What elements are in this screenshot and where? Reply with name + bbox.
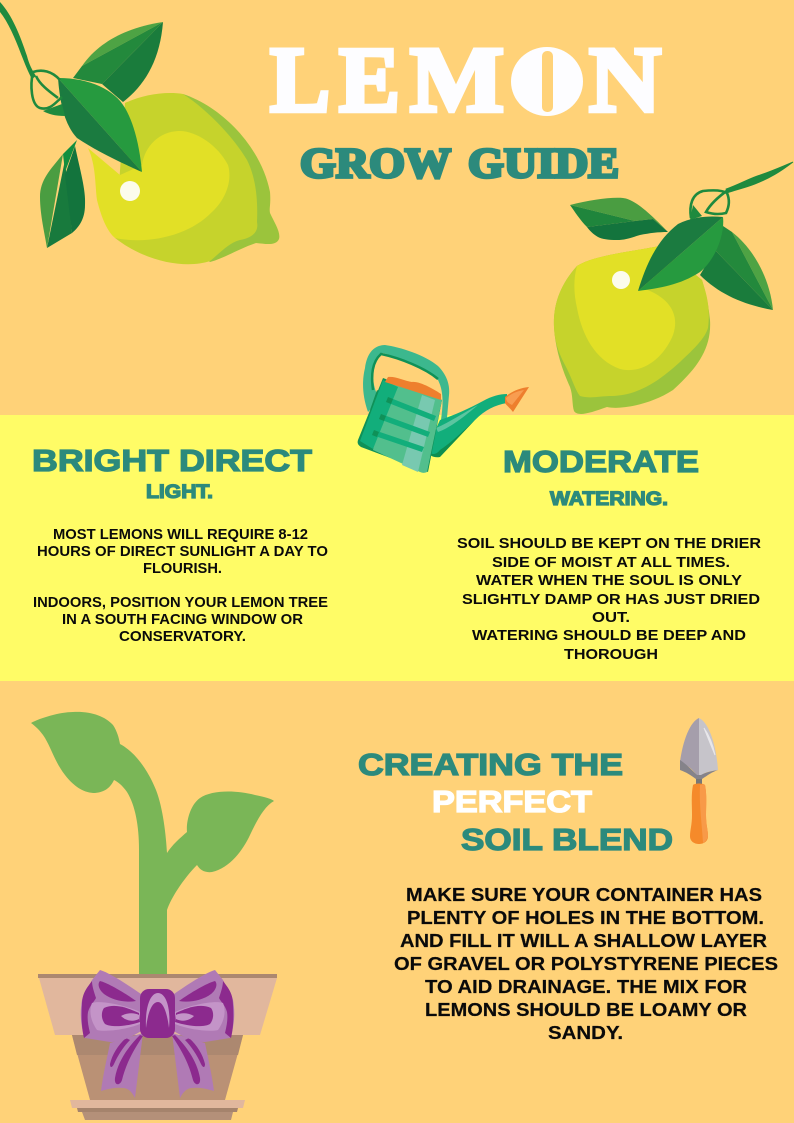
text block: soil advice: LEMONS SHOULD BE LOAMY OR (425, 1000, 747, 1020)
panel: yellow light and watering band (0, 415, 794, 681)
text block: light advice: FLOURISH. (143, 561, 222, 577)
text block: watering advice: THOROUGH (564, 647, 658, 663)
subtitle: GROW GUIDE (300, 142, 619, 188)
icon: garden trowel (680, 718, 718, 844)
heading: creating the: CREATING THE (358, 747, 623, 782)
title: LEMON: L (270, 29, 330, 132)
text block: watering advice (457, 536, 761, 663)
title: LEMON: M (410, 29, 504, 132)
heading: soil blend: SOIL BLEND (461, 822, 673, 857)
heading: bright direct: BRIGHT DIRECT (32, 443, 312, 478)
subheading: watering: WATERING. (550, 489, 668, 510)
text block: watering advice: SLIGHTLY DAMP OR HAS JUST DRIED (462, 592, 760, 608)
text block: watering advice: SIDE OF MOIST AT ALL TIMES. (492, 555, 730, 571)
text block: watering advice: WATER WHEN THE SOUL IS ONLY (476, 573, 742, 589)
bow (81, 970, 234, 1098)
text block: watering advice: WATERING SHOULD BE DEEP AND (472, 628, 746, 644)
title: LEMON: N (589, 29, 661, 132)
text block: soil advice: OF GRAVEL OR POLYSTYRENE PIECES (394, 954, 778, 974)
heading: perfect: PERFECT (432, 784, 592, 819)
text block: light advice: HOURS OF DIRECT SUNLIGHT A DAY TO (37, 544, 328, 560)
icon: watering can (358, 345, 529, 473)
title: LEMON: E (339, 29, 400, 132)
title: LEMON (270, 29, 661, 132)
text block: watering advice: OUT. (592, 610, 630, 626)
text block: light advice (33, 527, 328, 645)
text block: soil advice: SANDY. (548, 1023, 623, 1043)
icon: top left lemon with leaves (0, 2, 279, 264)
text block: light advice: INDOORS, POSITION YOUR LEMON TREE (33, 595, 328, 611)
text block: light advice: MOST LEMONS WILL REQUIRE 8-12 (53, 527, 308, 543)
icon: right lemon with leaves (554, 162, 793, 414)
subtitle: GROW GUIDE: GROW (300, 142, 451, 188)
text block: soil advice: PLENTY OF HOLES IN THE BOTTOM. (407, 908, 764, 928)
text block: soil advice (394, 885, 778, 1043)
text block: watering advice: SOIL SHOULD BE KEPT ON THE DRIER (457, 536, 761, 552)
pot (38, 974, 277, 1120)
text block: soil advice: MAKE SURE YOUR CONTAINER HAS (406, 885, 762, 905)
text block: light advice: CONSERVATORY. (119, 629, 246, 645)
text block: soil advice: AND FILL IT WILL A SHALLOW LAYER (400, 931, 767, 951)
subheading: light: LIGHT. (146, 482, 213, 503)
text block: light advice: IN A SOUTH FACING WINDOW OR (62, 612, 303, 628)
text block: soil advice: TO AID DRAINAGE. THE MIX FOR (425, 977, 747, 997)
subtitle: GROW GUIDE: GUIDE (468, 142, 619, 188)
heading: moderate: MODERATE (503, 444, 699, 479)
icon: plant in pot with bow (31, 712, 277, 1120)
